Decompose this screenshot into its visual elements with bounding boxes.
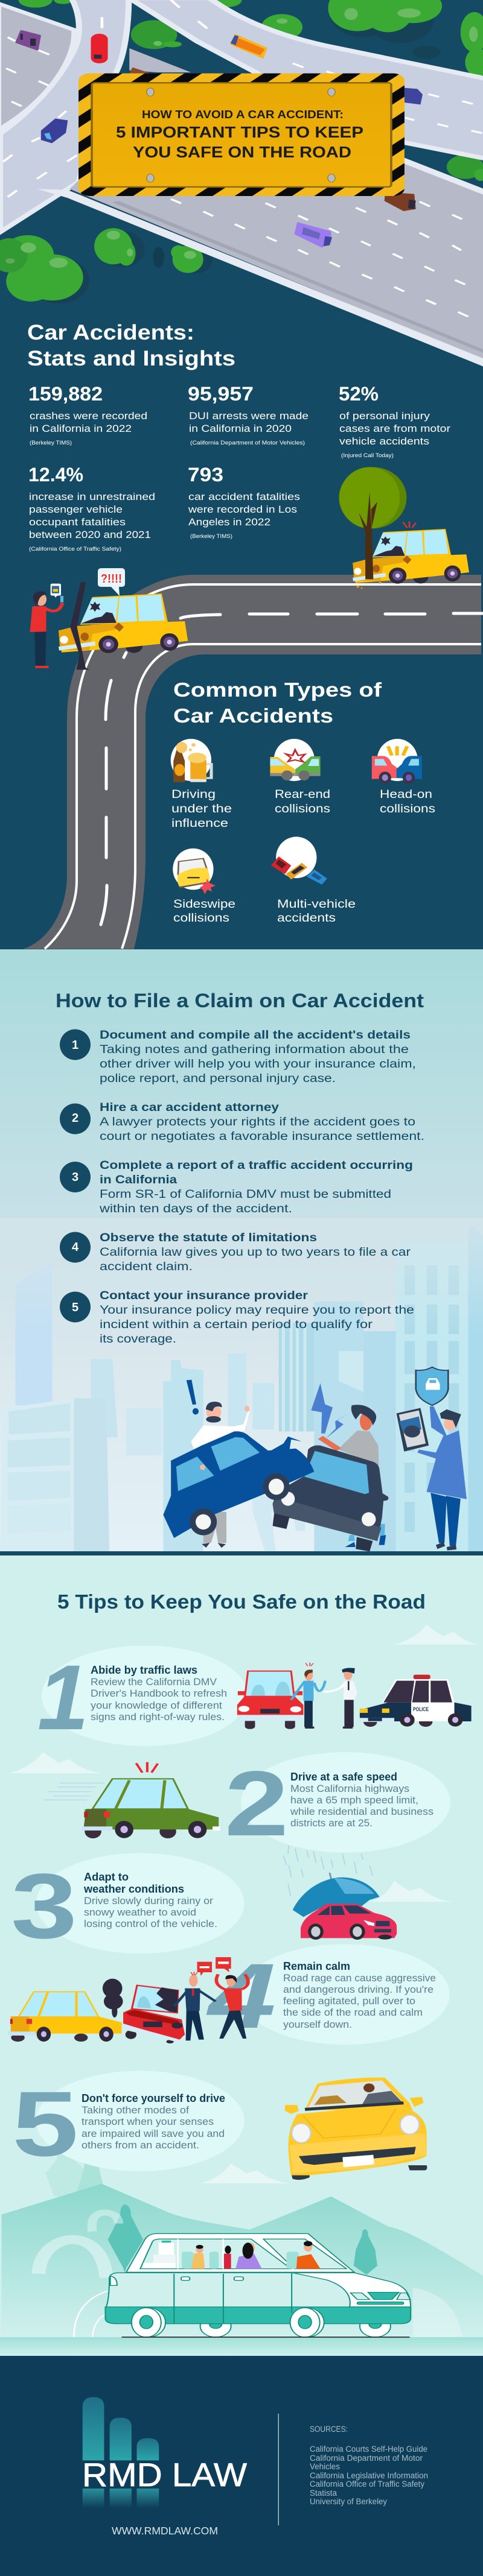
stat: fatalities: Angeles in 2022: [188, 516, 270, 528]
illustration: speeding green car: [43, 1762, 220, 1838]
step 1: Document and compile all the accident's details: [100, 1029, 411, 1042]
stat: DUI arrests: (California Department of Motor Vehicles): [190, 440, 305, 446]
stat: fatalities: 793: [188, 464, 223, 486]
stat: crashes: (Berkeley TIMS): [30, 440, 72, 446]
divider: [278, 2414, 279, 2525]
step 3: in California: [100, 1174, 177, 1186]
illustration: road rage after collision: [8, 1957, 248, 2043]
type: sideswipe collisions: collisions: [173, 911, 229, 925]
divider bar: [0, 1551, 483, 1555]
tip 4: Road rage can cause aggressive: [283, 1972, 436, 1984]
step 2: Hire a car accident attorney: [100, 1101, 280, 1114]
panel: footer: [0, 2356, 483, 2576]
officer: [324, 1668, 357, 1729]
step 5: Your insurance policy may require you to report the: [100, 1304, 414, 1317]
tip 3: 3: [11, 1855, 77, 1958]
roads: [0, 0, 483, 368]
type: head-on collisions: [372, 739, 435, 815]
sources list: SOURCES:: [310, 2425, 348, 2434]
stat: fatalities: [188, 464, 300, 540]
illustration: impaired driver in yellow car: [285, 2078, 427, 2180]
step 5: its coverage.: [100, 1333, 176, 1346]
step 4: Observe the statute of limitations: [100, 1232, 317, 1244]
stat: fatalities: car accident fatalities: [188, 491, 300, 502]
heading: stats: Stats and Insights: [27, 347, 235, 370]
panel: five safety tips: [0, 1555, 483, 2356]
tip 2: 2: [225, 1752, 289, 1855]
illustration: driver and police officer: [237, 1663, 472, 1729]
tip 1: signs and right-of-way rules.: [91, 1711, 225, 1723]
sources list: California Courts Self-Help Guide: [310, 2445, 427, 2454]
tip 5: 5: [12, 2072, 78, 2176]
step 1: 1: [72, 1039, 78, 1052]
type: rear-end collisions: Rear-end: [275, 788, 330, 801]
small cars on the road: [17, 31, 423, 248]
step 5: Contact your insurance provider: [100, 1290, 309, 1302]
type: rear-end collisions: collisions: [275, 802, 330, 815]
stat: DUI arrests: 95,957: [188, 383, 254, 405]
tip 3: [11, 1853, 245, 1958]
tip 3: Drive slowly during rainy or: [84, 1895, 213, 1907]
police car: [359, 1675, 472, 1727]
tip 2: Most California highways: [290, 1783, 409, 1794]
blue car: [163, 1431, 314, 1538]
tip 3: weather conditions: [83, 1883, 184, 1895]
title sign: HOW TO AVOID A CAR ACCIDENT:: [142, 109, 344, 121]
person with tablet and shield: [397, 1367, 467, 1551]
stat: unrestrained occupants: [28, 464, 155, 552]
type: head-on collisions: Head-on: [380, 788, 432, 801]
tip 4: and dangerous driving. If you're: [283, 1984, 433, 1995]
heading: 5 tips: 5 Tips to Keep You Safe on the Road: [57, 1590, 426, 1613]
illustration: yellow car hit pole: [59, 582, 188, 669]
speech bubble: [98, 568, 125, 596]
type: driving under the influence: [171, 739, 232, 830]
man in white: [187, 1380, 249, 1548]
tip 4: Remain calm: [283, 1960, 350, 1972]
step 1: Taking notes and gathering information about the: [100, 1043, 409, 1056]
sources list: Vehicles: [310, 2462, 340, 2471]
stat: fatalities: were recorded in Los: [188, 504, 297, 515]
sources list: [310, 2425, 428, 2506]
tip 5: transport when your senses: [82, 2116, 214, 2127]
step 1: police report, and personal injury case.: [100, 1072, 336, 1085]
tip 4: [206, 1944, 450, 2048]
stat: fatalities: (Berkeley TIMS): [190, 533, 232, 540]
sources list: University of Berkeley: [310, 2497, 387, 2506]
stat: unrestrained occupants: 12.4%: [28, 464, 83, 486]
step 4: accident claim.: [100, 1261, 193, 1273]
step 3: [60, 1159, 413, 1215]
tip 2: districts are at 25.: [290, 1817, 373, 1829]
step 2: 2: [72, 1112, 78, 1125]
sources list: Statista: [310, 2489, 337, 2498]
illustration: car under umbrella in rain: [283, 1846, 397, 1940]
title sign: YOU SAFE ON THE ROAD: [133, 143, 351, 161]
stat: crashes: crashes were recorded: [30, 410, 147, 422]
panel: common types of car accidents: [171, 679, 435, 925]
man in suit: [174, 1962, 216, 2040]
illustration: car crashed into tree: [339, 467, 469, 589]
illustration: bystander photographing: [30, 584, 63, 668]
type: driving under the influence: under the: [171, 802, 232, 815]
heading: stats: Car Accidents:: [27, 321, 194, 344]
tip 2: [225, 1752, 450, 1855]
yellow car: [8, 1992, 122, 2042]
tip 5: Don't force yourself to drive: [82, 2092, 225, 2104]
stat: unrestrained occupants: between 2020 and 2021: [29, 529, 151, 540]
panel: how to file a claim: [0, 949, 483, 1555]
step 3: 3: [72, 1171, 78, 1184]
stat: unrestrained occupants: (California Office of Traffic Safety): [29, 546, 121, 552]
driver: [291, 1663, 325, 1729]
background mountains and trees: [0, 2145, 483, 2356]
title sign: 5 IMPORTANT TIPS TO KEEP: [116, 123, 363, 141]
stat: unrestrained occupants: passenger vehicle: [29, 504, 123, 515]
step 1: [60, 1029, 416, 1085]
panel: hero road scene: [0, 0, 483, 949]
sources list: California Office of Traffic Safety: [310, 2479, 424, 2489]
tip 5: others from an accident.: [82, 2139, 199, 2151]
step 3: within ten days of the accident.: [99, 1203, 292, 1215]
winding road: [23, 575, 483, 949]
step 4: 4: [72, 1241, 79, 1254]
logo: RMD Law: [82, 2397, 247, 2537]
stat: unrestrained occupants: increase in unrestrained: [29, 491, 155, 502]
tip 4: yourself down.: [283, 2019, 352, 2030]
logo: RMD Law: RMD LAW: [82, 2456, 247, 2493]
illustration: driver and police officer: POLICE: [413, 1706, 429, 1712]
stat: personal injury: [339, 383, 450, 459]
tip 3: snowy weather to avoid: [84, 1907, 196, 1918]
stat: crashes: [28, 383, 147, 446]
step 2: [60, 1101, 424, 1143]
tip 3: losing control of the vehicle.: [84, 1918, 217, 1929]
heading: stats: [27, 321, 235, 370]
type: multi-vehicle accidents: Multi-vehicle: [277, 897, 356, 911]
stat: crashes: in California in 2022: [30, 423, 132, 434]
step 2: A lawyer protects your rights if the accident goes to: [100, 1116, 415, 1128]
tip 1: Abide by traffic laws: [91, 1664, 197, 1676]
tip 2: have a 65 mph speed limit,: [290, 1794, 418, 1806]
tip 5: [12, 2071, 245, 2176]
tip 1: your knowledge of different: [91, 1700, 222, 1711]
step 3: Form SR-1 of California DMV must be submitted: [100, 1188, 391, 1201]
step 5: incident within a certain period to qualify for: [100, 1318, 373, 1331]
logo: RMD Law: WWW.RMDLAW.COM: [112, 2525, 218, 2537]
stat: unrestrained occupants: occupant fatalities: [29, 516, 126, 528]
step 1: other driver will help you with your insurance claim,: [100, 1058, 416, 1071]
type: head-on collisions: collisions: [380, 802, 435, 815]
illustration: two-car collision with people: [163, 1367, 467, 1551]
dark car: [273, 1445, 388, 1551]
panel: stats and insights: [23, 321, 483, 949]
type: sideswipe collisions: Sideswipe: [173, 897, 235, 911]
title sign: [78, 74, 405, 196]
tip 3: Adapt to: [84, 1871, 129, 1883]
background hills: [9, 1624, 481, 1902]
stat: crashes: 159,882: [28, 383, 103, 405]
man in red: [216, 1957, 248, 2039]
grey shirted person: [311, 1383, 386, 1547]
type: driving under the influence: influence: [171, 817, 228, 830]
stat: DUI arrests: DUI arrests were made: [189, 410, 309, 422]
type: rear-end collisions: [270, 739, 330, 815]
heading: common types: [173, 679, 382, 727]
type: sideswipe collisions: [173, 849, 235, 925]
type: multi-vehicle accidents: accidents: [277, 911, 336, 925]
type: driving under the influence: Driving: [171, 788, 216, 801]
tip 2: while residential and business: [290, 1806, 433, 1817]
stat: DUI arrests: in California in 2020: [189, 423, 292, 434]
step 4: [60, 1232, 411, 1273]
stat: personal injury: vehicle accidents: [339, 435, 429, 447]
step 2: court or negotiates a favorable insurance settlement.: [100, 1130, 424, 1143]
heading: file a claim: How to File a Claim on Car Accident: [56, 990, 424, 1011]
tip 4: feeling agitated, pull over to: [283, 1995, 415, 2007]
red crashed car: [122, 1986, 185, 2043]
stat: DUI arrests: [188, 383, 309, 446]
step 3: Complete a report of a traffic accident occurring: [100, 1159, 413, 1172]
smoke: [103, 1979, 123, 2017]
stat: personal injury: cases are from motor: [339, 423, 450, 434]
step 4: California law gives you up to two years to file a car: [100, 1246, 411, 1259]
tip 1: 1: [37, 1646, 89, 1749]
heading: common types: Common Types of: [173, 679, 382, 701]
city skyline background: [0, 1218, 483, 1551]
step 5: 5: [72, 1301, 78, 1314]
tip 5: Taking other modes of: [82, 2104, 189, 2116]
sources list: California Department of Motor: [310, 2454, 423, 2463]
tip 1: Driver's Handbook to refresh: [91, 1688, 227, 1699]
tip 1: Review the California DMV: [91, 1676, 217, 1688]
sources list: California Legislative Information: [310, 2471, 428, 2480]
tip 4: 4: [206, 1945, 276, 2048]
tip 1: [37, 1645, 248, 1749]
tip 5: are impaired will save you and: [82, 2128, 225, 2139]
step 5: [60, 1290, 414, 1346]
heading: common types: Car Accidents: [173, 704, 333, 727]
trees around the interchange: [0, 0, 483, 303]
tip 2: Drive at a safe speed: [290, 1771, 397, 1783]
stat: personal injury: of personal injury: [339, 410, 430, 422]
stat: personal injury: (Injured Call Today): [341, 452, 394, 459]
speech bubble: ?!!!!: [101, 572, 122, 586]
illustration: family in a car: [105, 2233, 411, 2337]
type: multi-vehicle accidents: [271, 837, 356, 925]
red car: [237, 1671, 304, 1729]
tip 4: the side of the road and calm: [283, 2007, 423, 2018]
stat: personal injury: 52%: [339, 383, 379, 405]
